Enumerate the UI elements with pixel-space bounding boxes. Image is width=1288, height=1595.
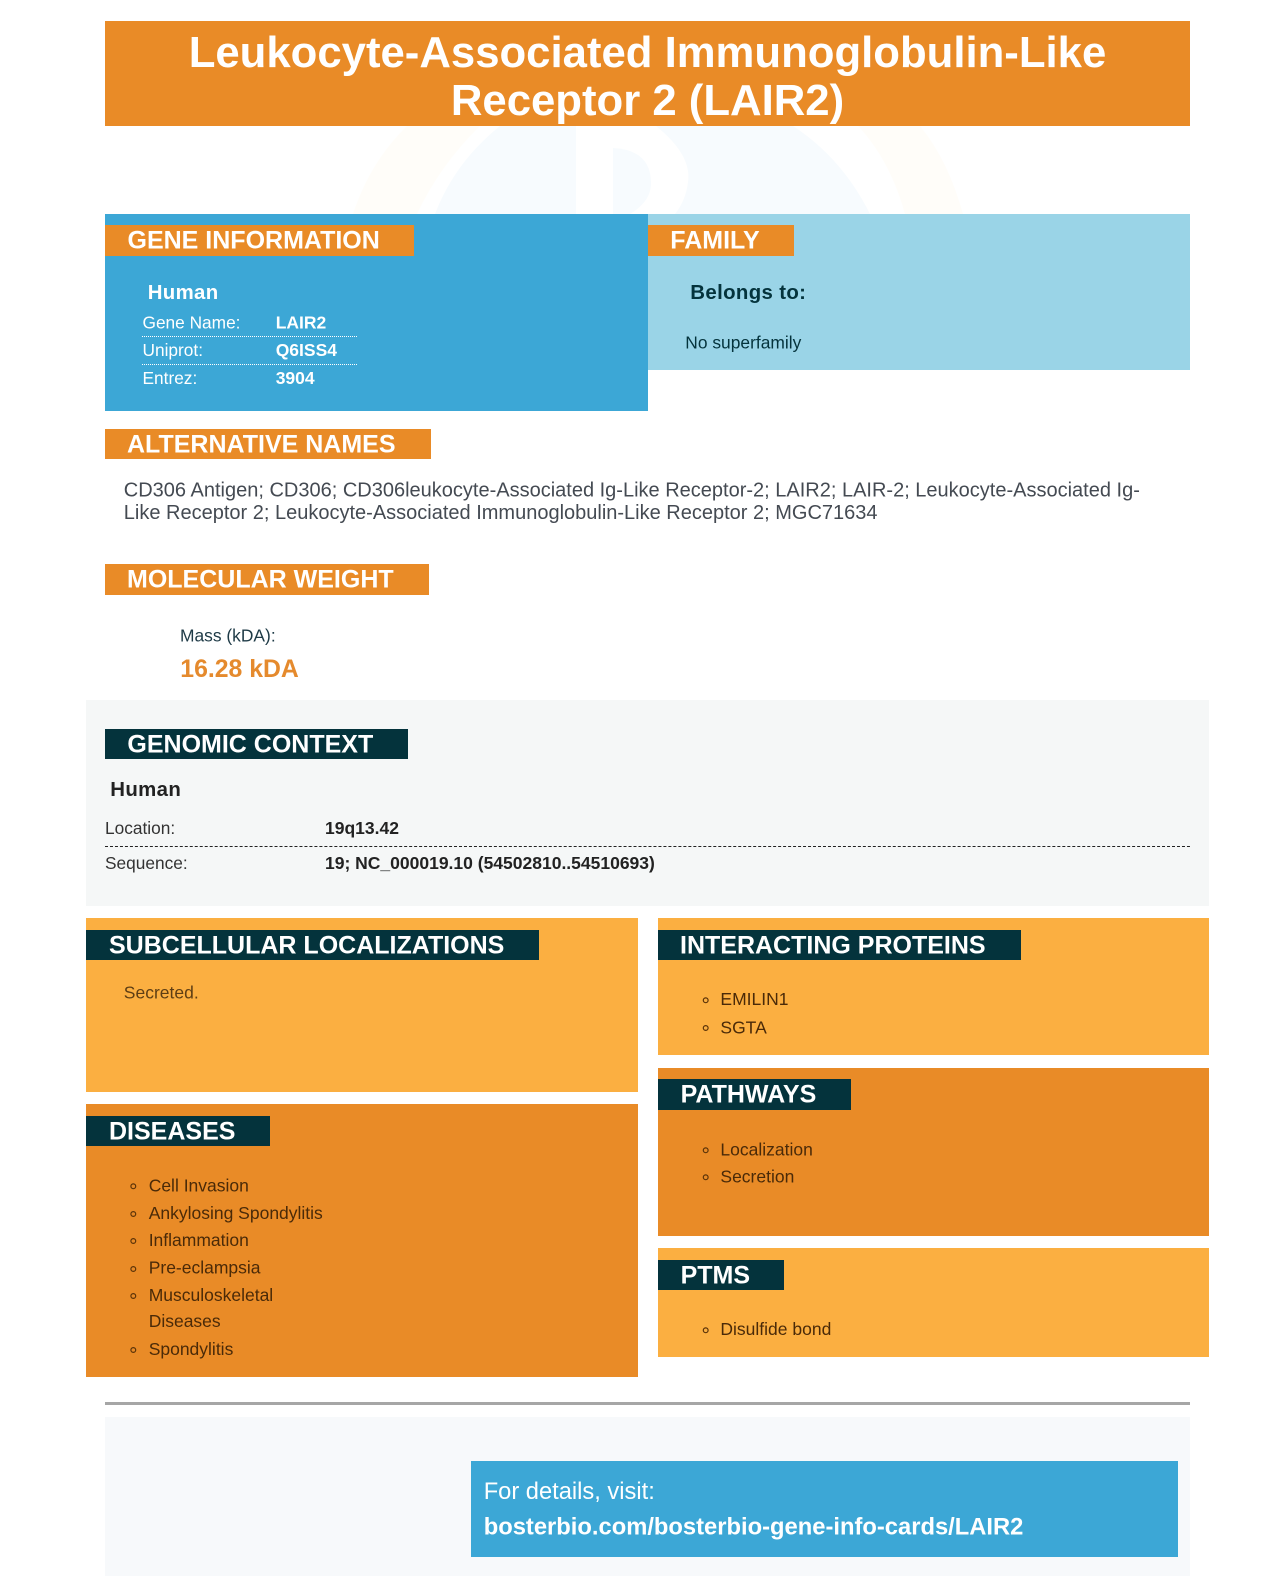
title banner bbox=[105, 21, 1190, 126]
heading: alternative names: ALTERNATIVE NAMES bbox=[127, 431, 396, 459]
disease list: Pre-eclampsia bbox=[149, 1258, 261, 1278]
gene details table: Entrez: bbox=[142, 368, 197, 388]
heading: pathways bbox=[658, 1079, 851, 1110]
disease list: Musculoskeletal bbox=[149, 1285, 273, 1305]
panel: diseases bbox=[86, 1104, 638, 1377]
footer panel bbox=[105, 1417, 1190, 1576]
callout: details link: For details, visit: bbox=[484, 1479, 655, 1505]
gene details table: Q6ISS4 bbox=[276, 340, 337, 360]
species label: Human bbox=[148, 282, 219, 304]
panel: subcellular localizations bbox=[86, 918, 638, 1092]
disease list: Cell Invasion bbox=[149, 1175, 249, 1195]
disease list: Ankylosing Spondylitis bbox=[149, 1203, 323, 1223]
gene details table: Gene Name: bbox=[142, 313, 240, 333]
heading: family: FAMILY bbox=[670, 226, 760, 254]
heading: diseases: DISEASES bbox=[109, 1117, 235, 1145]
panel: gene information bbox=[105, 214, 648, 411]
pathway list bbox=[703, 1140, 813, 1186]
ptm list: Disulfide bond bbox=[720, 1319, 831, 1339]
alternative names text bbox=[124, 480, 1140, 524]
panel: pathways bbox=[658, 1068, 1209, 1236]
family value: No superfamily bbox=[685, 332, 802, 352]
panel: family bbox=[648, 214, 1190, 370]
alternative names text: Like Receptor 2; Leukocyte-Associated Immunoglobulin-Like Receptor 2; MGC71634 bbox=[124, 502, 878, 524]
watermark logo bbox=[353, 126, 963, 214]
heading: interacting proteins: INTERACTING PROTEINS bbox=[680, 931, 986, 959]
heading: molecular weight: MOLECULAR WEIGHT bbox=[127, 566, 394, 594]
disease list: Diseases bbox=[149, 1311, 221, 1331]
title banner: Leukocyte-Associated Immunoglobulin-Like bbox=[189, 28, 1106, 77]
family label: Belongs to: bbox=[690, 282, 806, 304]
heading: gene information: GENE INFORMATION bbox=[128, 226, 380, 254]
molecular weight value bbox=[180, 626, 299, 683]
species label: Human bbox=[110, 779, 181, 801]
protein list: EMILIN1 bbox=[720, 989, 788, 1009]
heading: genomic context: GENOMIC CONTEXT bbox=[127, 731, 373, 759]
panel: interacting proteins bbox=[658, 918, 1209, 1055]
pathway list: Secretion bbox=[720, 1166, 794, 1186]
location row: Location: bbox=[105, 818, 175, 838]
heading: diseases bbox=[86, 1116, 270, 1146]
gene details table: LAIR2 bbox=[276, 313, 327, 333]
callout: details link bbox=[471, 1461, 1178, 1557]
protein list: SGTA bbox=[720, 1017, 767, 1037]
location row bbox=[105, 818, 399, 838]
sequence row: 19; NC_000019.10 (54502810..54510693) bbox=[325, 853, 655, 873]
sequence row: Sequence: bbox=[105, 853, 188, 873]
panel: genomic context bbox=[86, 700, 1209, 906]
disease list bbox=[131, 1175, 323, 1359]
gene details table: 3904 bbox=[276, 368, 315, 388]
pathway list: Localization bbox=[720, 1140, 813, 1160]
molecular weight value: 16.28 kDA bbox=[180, 656, 299, 683]
heading: subcellular localizations: SUBCELLULAR LOCALIZATIONS bbox=[109, 931, 504, 959]
gene details table bbox=[142, 313, 357, 388]
alternative names text: CD306 Antigen; CD306; CD306leukocyte-Associated Ig-Like Receptor-2; LAIR2; LAIR-2; Leukocyte-Associated Ig- bbox=[124, 480, 1140, 502]
heading: pathways: PATHWAYS bbox=[681, 1080, 816, 1108]
protein list bbox=[703, 989, 788, 1037]
molecular weight value: Mass (kDA): bbox=[180, 626, 276, 646]
title banner: Receptor 2 (LAIR2) bbox=[451, 76, 844, 125]
heading: ptms: PTMS bbox=[681, 1261, 750, 1289]
gene details table: Uniprot: bbox=[142, 340, 203, 360]
panel: ptms bbox=[658, 1248, 1209, 1357]
disease list: Spondylitis bbox=[149, 1339, 234, 1359]
callout: details link: bosterbio.com/bosterbio-gene-info-cards/LAIR2 bbox=[484, 1514, 1023, 1541]
location row: 19q13.42 bbox=[325, 818, 399, 838]
heading: ptms bbox=[658, 1260, 784, 1290]
disease list: Inflammation bbox=[149, 1230, 249, 1250]
heading: family bbox=[648, 225, 794, 256]
localization text: Secreted. bbox=[124, 983, 199, 1003]
sequence row bbox=[105, 853, 655, 873]
